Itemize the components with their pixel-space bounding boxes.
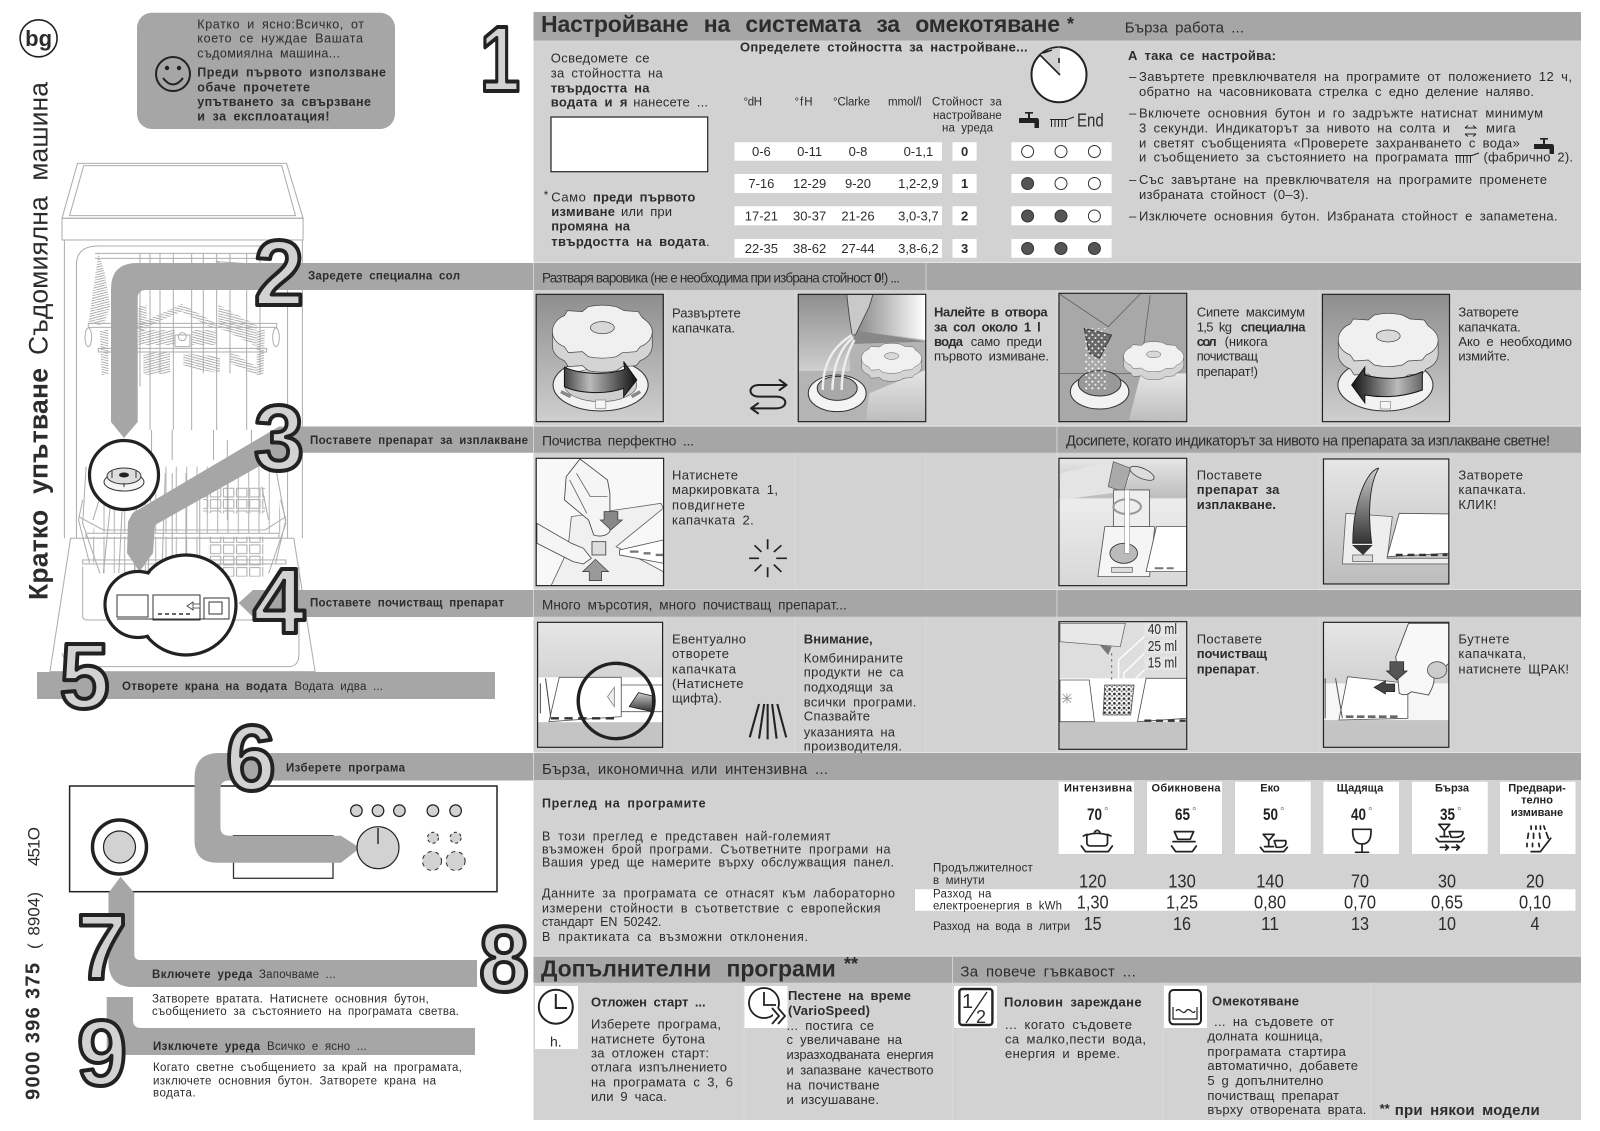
step labels: Поставете препарат за изплакване xyxy=(310,435,528,447)
table: programs: 16 xyxy=(1173,914,1191,934)
image: add salt xyxy=(1059,293,1187,422)
table: hardness values: 1,2-2,9 xyxy=(898,176,939,191)
text: push lid shut: натиснете ЩРАК! xyxy=(1458,661,1569,676)
image: close lid click xyxy=(1323,459,1449,584)
step numbers xyxy=(60,7,529,1105)
table: programs: 1,25 xyxy=(1166,892,1198,912)
callout: before first use: обаче прочетете xyxy=(197,81,310,95)
table: programs: електроенергия в kWh xyxy=(933,900,1062,912)
text: open lid: повдигнете xyxy=(672,497,745,512)
text: add salt: препарат!) xyxy=(1197,364,1258,379)
table: programs: 20 xyxy=(1526,871,1544,891)
circle: detergent dispenser close-up xyxy=(105,555,236,655)
table: hardness values: 0 xyxy=(961,144,968,159)
table: programs: Интензивна xyxy=(1064,783,1133,795)
header band: step 3 rinse aid: Почиства перфектно ... xyxy=(542,432,694,448)
option: soak: ... на съдовете от xyxy=(1214,1014,1334,1029)
option: VarioSpeed: на почистване xyxy=(786,1077,880,1092)
text: add salt: Сипете максимум xyxy=(1197,305,1305,320)
illustration: dishwasher with open door xyxy=(50,163,315,672)
image: open lid with fingers xyxy=(536,458,664,587)
text: fill rinse aid xyxy=(1197,467,1280,512)
language badge: bg: bg xyxy=(25,26,52,51)
table: programs: в минути xyxy=(933,875,984,887)
text: open dispenser: Евентуално xyxy=(672,631,746,646)
text: programs overview: Преглед на програмите xyxy=(542,796,706,810)
table: hardness values: 38-62 xyxy=(793,241,826,256)
text: close lid click: КЛИК! xyxy=(1458,497,1497,512)
option: delayed start: на програмата с 3, 6 xyxy=(591,1075,733,1090)
table: hardness values: 30-37 xyxy=(793,208,826,224)
step labels: Заредете специална сол xyxy=(308,270,460,282)
table: programs: 120 xyxy=(1079,871,1106,891)
option: half load: 1 xyxy=(962,991,973,1013)
step labels: Всичко е ясно ... xyxy=(267,1041,367,1053)
arrow band: step 7 xyxy=(108,877,477,987)
text: fill detergent xyxy=(1197,631,1267,676)
step labels: Включете уреда xyxy=(152,969,253,981)
text: pour water: Налейте в отвора xyxy=(934,305,1048,320)
table: hardness values: Определете стойността за настройване... xyxy=(740,40,1028,55)
text: push lid shut: капачката, xyxy=(1458,646,1526,661)
text: open dispenser: капачката xyxy=(672,661,737,676)
callout: before first use: Кратко и ясно:Всичко, от xyxy=(197,17,364,31)
text: warning: Внимание, xyxy=(804,631,873,646)
option: delayed start: или 9 часа. xyxy=(591,1089,667,1104)
table: programs: Обикновена xyxy=(1152,783,1221,795)
step numbers: 9 xyxy=(77,1001,127,1105)
text: warning: указанията на xyxy=(804,725,896,740)
header band: softener system: * xyxy=(1067,14,1074,34)
option: delayed start: Изберете програма, xyxy=(591,1016,721,1031)
part number: 9000 396 375 xyxy=(22,963,44,1100)
header band: additional programs: Допълнителни програми xyxy=(541,956,836,982)
header band: step 6 programs: Бърза, икономична или интензивна ... xyxy=(542,761,828,778)
table: programs: Разход на вода в литри xyxy=(933,921,1070,933)
table: programs: 4 xyxy=(1530,914,1540,934)
footnote: при някои модели xyxy=(1395,1102,1540,1119)
text: programs overview: В практиката са възможни отклонения. xyxy=(542,930,808,944)
text: how to set: А така се настройва: xyxy=(1128,48,1276,63)
text: find the water hardness: за стойността на xyxy=(551,65,663,80)
callout: before first use: и за експлоатация! xyxy=(197,110,330,124)
header band: step 2 salt xyxy=(534,263,1581,290)
option: VarioSpeed: (VarioSpeed) xyxy=(788,1003,870,1018)
text: add salt: 1,5 kg xyxy=(1197,320,1232,335)
table: programs: Щадяща xyxy=(1337,783,1384,795)
option: half load: енергия и време. xyxy=(1005,1046,1120,1061)
text: how to set: – xyxy=(1129,106,1137,121)
step labels: Водата идва ... xyxy=(294,681,383,693)
text: close lid click: Затворете xyxy=(1458,467,1523,482)
labels: detergent quantities: 15 ml xyxy=(1148,655,1177,672)
language badge: bg xyxy=(20,20,57,57)
arrow band: step 2 xyxy=(111,263,533,438)
table: hardness values: 3,0-3,7 xyxy=(898,208,939,224)
option: soak: Омекотяване xyxy=(1212,994,1299,1009)
text: find the water hardness: Осведомете се xyxy=(551,51,650,66)
text: unscrew cap: Развъртете xyxy=(672,306,741,321)
icon: spray xyxy=(750,704,786,739)
table: programs: измиване xyxy=(1511,807,1563,819)
step labels: съобщението за състоянието на програмата светва. xyxy=(152,1006,459,1018)
table: hardness values: 1 xyxy=(961,176,968,191)
text: close cap: капачката. xyxy=(1458,320,1521,335)
table: programs: 30 xyxy=(1438,871,1456,891)
text: open dispenser: щифта). xyxy=(672,691,722,706)
text: open dispenser: отворете xyxy=(672,646,729,661)
table: hardness values: °dH xyxy=(744,97,762,109)
text: how to set: Със завъртане на превключвателя на програмите променете xyxy=(1139,172,1547,187)
option: soak: почистващ препарат xyxy=(1207,1088,1339,1103)
option: half load: 2 xyxy=(976,1007,986,1027)
icons: tap, rake and End xyxy=(1019,111,1104,131)
callout: before first use: Преди първото използване xyxy=(197,66,386,80)
text: add salt: почистващ xyxy=(1197,349,1258,364)
table: programs: ° xyxy=(1280,806,1285,818)
arrow band: step 3 xyxy=(127,426,533,572)
text: unscrew cap: капачката. xyxy=(672,321,735,336)
text: how to set: 3 секунди. Индикаторът за нивото на солта и xyxy=(1139,121,1450,136)
table: programs: 0,70 xyxy=(1344,892,1376,912)
step labels: Изключете уреда xyxy=(153,1041,261,1053)
table: programs: 35 xyxy=(1440,805,1455,824)
step labels: Поставете почистващ препарат xyxy=(310,598,504,610)
header band: additional programs: За повече гъвкавост ... xyxy=(960,964,1136,981)
arrow band: step 4 xyxy=(239,590,533,617)
text: open lid xyxy=(672,467,778,527)
step labels: Когато светне съобщението за край на програмата, xyxy=(153,1062,462,1074)
table: programs: 10 xyxy=(1438,914,1456,934)
text: warning xyxy=(804,631,916,754)
text: how to set: – xyxy=(1129,69,1137,84)
labels: detergent quantities: 40 ml xyxy=(1148,621,1177,638)
text: how to set: – xyxy=(1129,209,1137,224)
text: find the water hardness: водата и я xyxy=(551,95,628,110)
table: programs: 11 xyxy=(1261,914,1279,934)
text: programs overview: измерени стойности в съответствие с европейския xyxy=(542,901,880,915)
part number xyxy=(22,827,44,1100)
text: warning: Комбинираните xyxy=(804,650,903,665)
text: warning: подходящи за xyxy=(804,679,894,694)
table: hardness values: mmol/l xyxy=(888,97,922,109)
table: hardness values: 7-16 xyxy=(748,176,774,191)
text: warning: Спазвайте xyxy=(804,709,870,724)
text: fill rinse aid: изплакване. xyxy=(1197,497,1276,512)
image: close cap xyxy=(1322,294,1450,422)
table: programs: Бърза xyxy=(1435,783,1470,795)
text: pour water: първото измиване. xyxy=(934,349,1049,364)
table: hardness values: 0-11 xyxy=(797,144,822,159)
text: open lid: маркировката 1, xyxy=(672,482,778,497)
text: how to set: обратно на часовниковата стрелка с едно деление наляво. xyxy=(1139,84,1534,99)
table: programs: 0,65 xyxy=(1431,892,1463,912)
table: programs: Продължителност xyxy=(933,863,1034,875)
text: how to set: (фабрично 2). xyxy=(1484,150,1573,165)
header band: additional programs: ** xyxy=(844,954,858,974)
header band: step 4 detergent xyxy=(534,590,1581,617)
table: programs: 0,10 xyxy=(1519,892,1551,912)
option: soak: върху отворената врата. xyxy=(1207,1102,1366,1117)
table: programs: ° xyxy=(1192,806,1197,818)
text: find the water hardness: твърдостта на xyxy=(551,81,650,96)
image: pour water xyxy=(798,294,926,422)
text: warning: производителя. xyxy=(804,739,902,754)
text: open dispenser xyxy=(672,631,746,706)
text: push lid shut: Бутнете xyxy=(1458,631,1509,646)
table: programs: телно xyxy=(1521,795,1553,807)
text: warning: всички програми. xyxy=(804,695,916,710)
text: programs overview: В този преглед е представен най-големият xyxy=(542,830,831,844)
text: fill detergent: почистващ xyxy=(1197,646,1267,661)
text: add salt: (никога xyxy=(1225,334,1268,349)
step numbers: 7 xyxy=(77,895,127,999)
step labels: Изберете програма xyxy=(286,763,406,775)
text: open lid: Натиснете xyxy=(672,467,738,482)
part number: ( 8904) xyxy=(24,892,44,949)
vertical title: Кратко упътване xyxy=(24,368,54,600)
text: how to set: и светят съобщенията «Проверете захранването с вода» xyxy=(1139,136,1520,151)
text: close lid click xyxy=(1458,467,1526,512)
labels: detergent quantities xyxy=(1148,621,1177,672)
text: pour water: само преди xyxy=(971,334,1042,349)
icon: rinse aid indicator xyxy=(749,539,787,577)
table: programs: 50 xyxy=(1263,805,1278,824)
table: hardness values: 9-20 xyxy=(845,176,871,191)
text: close cap: измийте. xyxy=(1458,349,1510,364)
text: find the water hardness: * xyxy=(544,190,549,202)
circle: salt container close-up xyxy=(90,440,158,510)
text: add salt: сол xyxy=(1197,334,1217,349)
text: find the water hardness: измиване xyxy=(551,204,615,219)
table: hardness values: 0-1,1 xyxy=(904,144,933,159)
control panel drawing xyxy=(70,753,533,892)
callout: before first use: което се нуждае Вашата xyxy=(197,32,363,46)
panel: right background xyxy=(534,12,1581,1120)
text: find the water hardness xyxy=(544,51,710,249)
table: hardness values: 3,8-6,2 xyxy=(898,241,939,256)
text: fill detergent: . xyxy=(1256,661,1260,676)
table: hardness values: 0-6 xyxy=(752,144,771,159)
table: hardness values: 12-29 xyxy=(793,176,826,191)
header band: step 3 rinse aid: Досипете, когато индикаторът за нивото на препарата за изплакване светне! xyxy=(1066,433,1550,449)
text: fill detergent: препарат xyxy=(1197,661,1256,676)
image: push lid shut xyxy=(1323,622,1449,747)
option: VarioSpeed: ... постига се xyxy=(786,1018,874,1033)
option: soak: автоматично, добавете xyxy=(1207,1058,1358,1073)
header band: softener system: Настройване на системата за омекотяване xyxy=(541,11,1060,37)
table: programs: ° xyxy=(1104,806,1109,818)
option: VarioSpeed: и изсушаване. xyxy=(786,1092,879,1107)
text: warning: продукти не са xyxy=(804,665,904,680)
callout: before first use xyxy=(137,13,395,129)
text: how to set: избраната стойност (0–3). xyxy=(1139,187,1309,202)
header band: additional programs xyxy=(534,954,1581,983)
option: delayed start: Отложен старт ... xyxy=(591,995,706,1010)
text: how to set: Включете основния бутон и го задръжте натиснат минимум xyxy=(1139,106,1543,121)
step numbers: 2 xyxy=(254,221,304,325)
table: hardness values xyxy=(734,40,1112,258)
table: programs: Разход на xyxy=(933,888,992,900)
table: hardness values: °Clarke xyxy=(833,97,870,109)
step labels xyxy=(122,270,528,1100)
option: VarioSpeed: с увеличаване на xyxy=(786,1032,903,1047)
option: half load: са малко,пести вода, xyxy=(1005,1032,1146,1046)
callout: before first use: упътването за свързване xyxy=(197,95,371,109)
table: programs: 1,30 xyxy=(1077,892,1109,912)
step labels: Отворете крана на водата xyxy=(122,681,288,693)
table: programs: Еко xyxy=(1260,783,1280,795)
text: fill rinse aid: Поставете xyxy=(1197,467,1262,482)
step labels: водата. xyxy=(153,1088,196,1100)
text: programs overview: стандарт EN 50242. xyxy=(542,915,662,929)
text: find the water hardness: твърдостта на водата xyxy=(551,234,706,249)
option: VarioSpeed: Пестене на време xyxy=(788,988,911,1003)
image: unscrew cap xyxy=(536,294,663,422)
text: find the water hardness: преди първото xyxy=(593,190,695,205)
table: hardness values: настройване xyxy=(933,110,1002,122)
table: hardness values: 3 xyxy=(961,241,968,256)
vertical title xyxy=(24,82,54,600)
text: close lid click: капачката. xyxy=(1458,482,1526,497)
table: programs: 70 xyxy=(1351,871,1369,891)
table: programs: ° xyxy=(1457,806,1462,818)
icon: swap arrows xyxy=(751,380,787,413)
table: programs: 140 xyxy=(1256,871,1284,891)
table: programs: ° xyxy=(1368,806,1373,818)
table: programs: 70 xyxy=(1087,805,1102,824)
option: delayed start: отлага изпълнението xyxy=(591,1060,727,1075)
step numbers: 3 xyxy=(254,386,304,490)
step numbers: 1 xyxy=(480,7,520,111)
table: programs: 40 xyxy=(1351,805,1366,824)
table: programs: Предвари- xyxy=(1508,783,1566,795)
header band: softener system xyxy=(534,11,1581,40)
icon: program dial clock xyxy=(1032,47,1086,102)
arrow band: step 5 xyxy=(37,672,495,699)
text: close cap xyxy=(1458,305,1572,364)
text: pour water: за сол около 1 l xyxy=(934,320,1041,335)
header band: step 2 salt: Разтваря варовика (не е необходима при избрана стойност 0!) ... xyxy=(542,271,900,286)
text: push lid shut xyxy=(1458,631,1569,676)
text: close cap: Затворете xyxy=(1458,305,1519,320)
option: soak: програмата стартира xyxy=(1207,1044,1347,1059)
table: programs: 0,80 xyxy=(1254,892,1286,912)
table: hardness values: 2 xyxy=(961,208,968,224)
header band: softener system: Бърза работа ... xyxy=(1125,20,1244,37)
step numbers: 4 xyxy=(253,549,305,653)
option: delayed start xyxy=(535,986,733,1104)
vertical title: Съдомиялна машина xyxy=(24,82,54,355)
table: programs: 65 xyxy=(1175,805,1190,824)
text: fill rinse aid: препарат за xyxy=(1197,482,1280,497)
text: pour water xyxy=(934,305,1049,364)
text: add salt xyxy=(1197,305,1306,379)
step labels: изключете основния бутон. Затворете крана на xyxy=(153,1075,437,1087)
icons: tap, rake and End: End xyxy=(1077,111,1104,131)
header band: step 3 rinse aid xyxy=(534,427,1581,453)
step numbers: 8 xyxy=(479,907,529,1011)
text: how to set: Завъртете превключвателя на програмите от положението 12 ч, xyxy=(1139,69,1572,84)
footnote: ** xyxy=(1380,1101,1391,1116)
text: open dispenser: (Натиснете xyxy=(672,676,744,691)
table: hardness values: на уреда xyxy=(942,123,994,135)
table: hardness values: 27-44 xyxy=(841,241,875,256)
table: programs: 130 xyxy=(1168,871,1196,891)
text: programs overview: Данните за програмата се отнасят към лабораторно xyxy=(542,886,895,900)
text: close cap: Ако е необходимо xyxy=(1458,334,1572,349)
text: find the water hardness: Само xyxy=(551,190,586,205)
part number: 451O xyxy=(24,827,44,866)
option: soak: долната кошница, xyxy=(1207,1029,1323,1044)
table: hardness values: °fH xyxy=(794,97,812,109)
text: how to set: – xyxy=(1129,172,1137,187)
option: soak: 5 g допълнително xyxy=(1207,1073,1323,1088)
text: programs overview xyxy=(542,796,895,944)
text: programs overview: възможен брой програми. Съответните програми на xyxy=(542,843,891,857)
text: unscrew cap xyxy=(672,306,741,336)
table: hardness values: 21-26 xyxy=(841,208,875,224)
option: half load xyxy=(954,986,1146,1061)
step numbers: 6 xyxy=(226,706,276,810)
text: programs overview: Вашия уред ще намерите върху обслужващия панел. xyxy=(542,856,894,870)
option: half load: ... когато съдовете xyxy=(1005,1017,1132,1032)
text: open lid: капачката 2. xyxy=(672,512,754,527)
table: programs xyxy=(915,782,1576,934)
arrow band: step 9 xyxy=(107,997,475,1055)
table: hardness values: 17-21 xyxy=(745,208,778,224)
text: find the water hardness: промяна на xyxy=(551,219,631,234)
table: hardness values: 0-8 xyxy=(849,144,867,159)
option: VarioSpeed xyxy=(744,986,934,1107)
text: how to set: Изключете основния бутон. Избраната стойност е запаметена. xyxy=(1139,209,1558,224)
table: hardness values: 22-35 xyxy=(745,241,778,256)
image: fill detergent xyxy=(1059,622,1187,749)
text: how to set xyxy=(1128,48,1573,224)
header band: step 6 programs xyxy=(534,753,1581,780)
table: programs: 15 xyxy=(1084,914,1102,934)
callout: before first use: съдомиялна машина... xyxy=(197,47,340,61)
step numbers: 5 xyxy=(60,624,110,728)
header band: step 4 detergent: Много мърсотия, много почистващ препарат... xyxy=(542,597,847,612)
option: delayed start: за отложен старт: xyxy=(591,1045,709,1060)
option: soak xyxy=(1164,986,1366,1117)
text: how to set: мига xyxy=(1486,121,1516,136)
image: open dispenser xyxy=(538,622,663,747)
text: pour water: вода xyxy=(934,334,964,349)
option: VarioSpeed: и запазване качеството xyxy=(786,1062,934,1077)
table: hardness values: Стойност за xyxy=(932,97,1002,109)
option: delayed start: h. xyxy=(550,1034,562,1050)
labels: detergent quantities: 25 ml xyxy=(1148,638,1177,655)
step labels: Започваме ... xyxy=(259,969,336,981)
image: fill rinse aid xyxy=(1059,458,1187,586)
text: find the water hardness: или при xyxy=(621,204,672,219)
table: programs: 13 xyxy=(1351,914,1369,934)
text: add salt: специална xyxy=(1241,320,1306,335)
text: fill detergent: Поставете xyxy=(1197,631,1262,646)
text: find the water hardness: нанесете ... xyxy=(633,95,708,110)
option: VarioSpeed: изразходваната енергия xyxy=(786,1047,934,1062)
text: find the water hardness: . xyxy=(706,234,710,249)
text: how to set: и съобщението за състоянието на програмата xyxy=(1139,150,1449,165)
step labels: Затворете вратата. Натиснете основния бутон, xyxy=(152,993,429,1005)
option: half load: Половин зареждане xyxy=(1004,995,1142,1010)
option: delayed start: натиснете бутона xyxy=(591,1031,706,1046)
